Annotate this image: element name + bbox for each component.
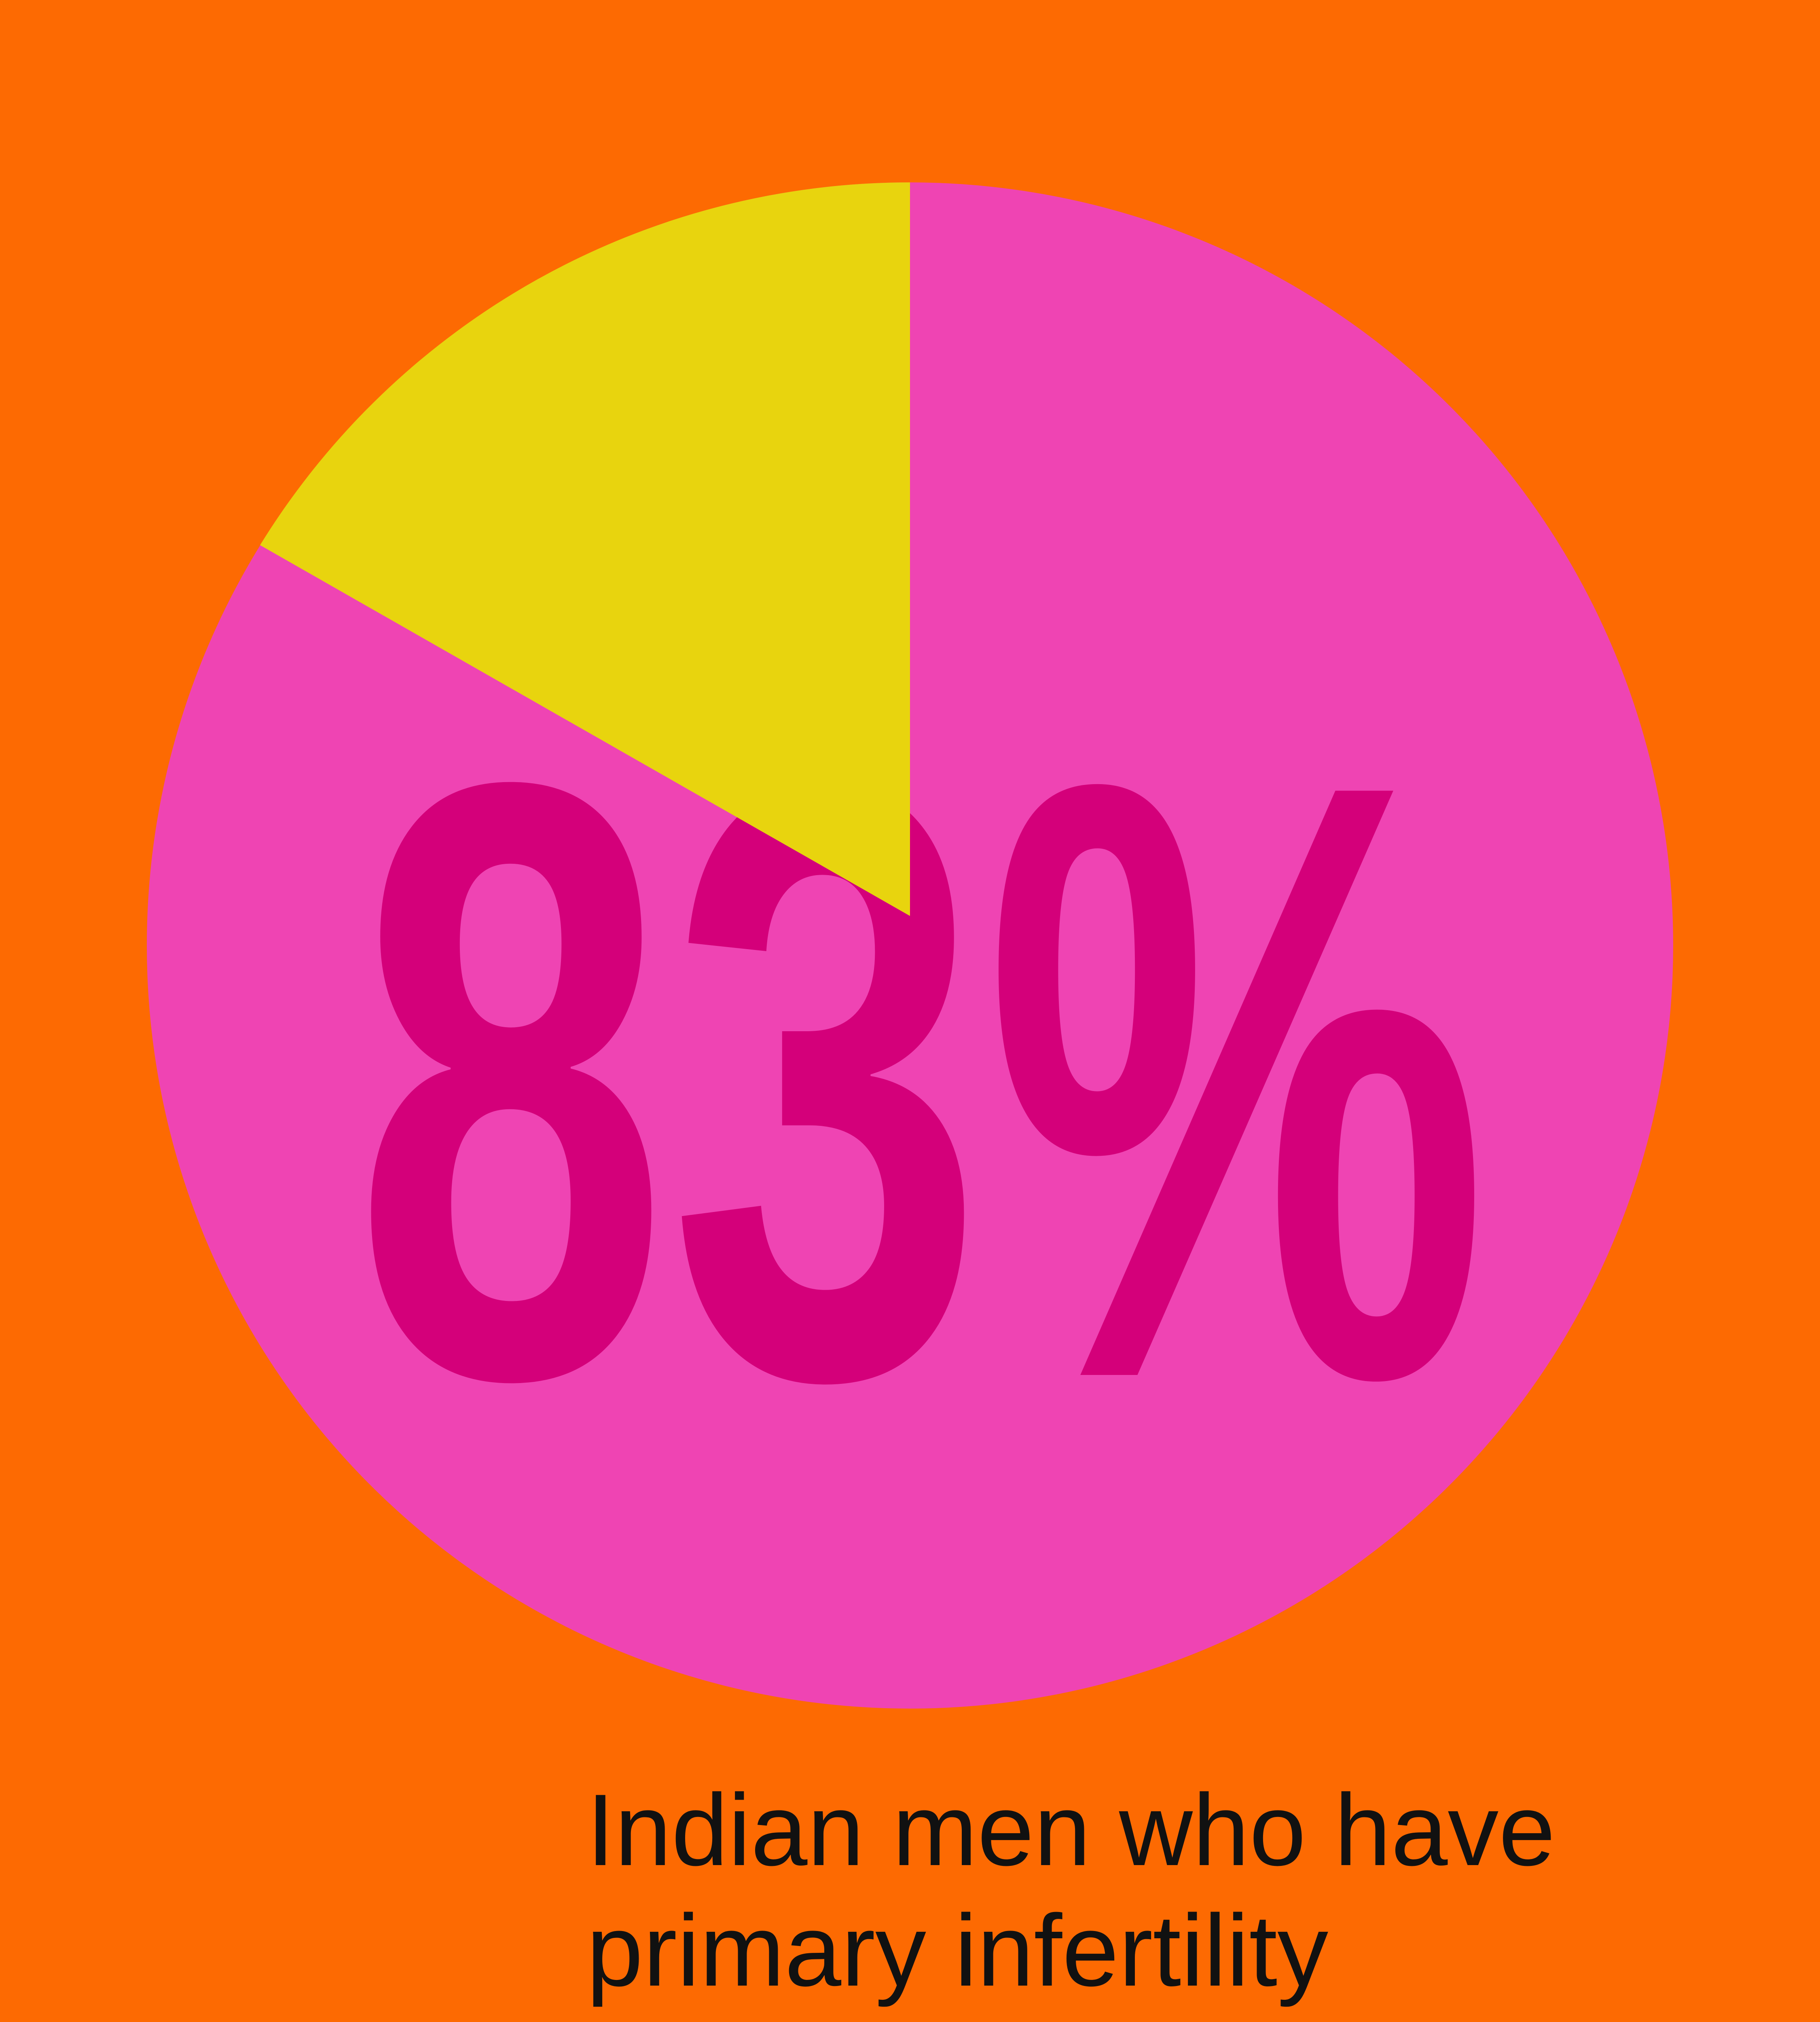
pie chart bbox=[147, 182, 1673, 1709]
caption: Indian men who have bbox=[586, 1773, 1555, 1887]
pie: yellow minority slice bbox=[260, 182, 910, 916]
pie: pink majority slice bbox=[147, 182, 1673, 1709]
caption: primary infertility bbox=[586, 1894, 1328, 2007]
